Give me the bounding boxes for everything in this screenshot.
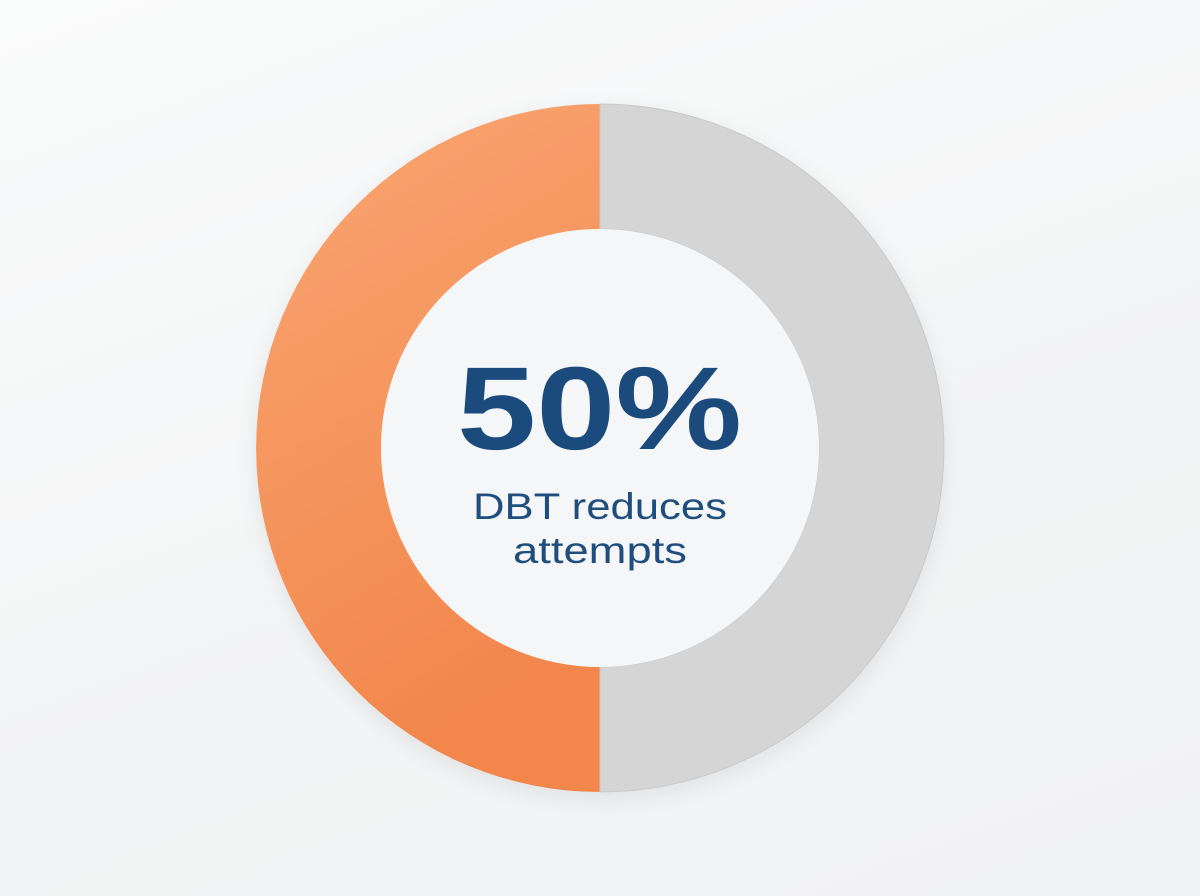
inner circle (381, 229, 819, 667)
segment: gray remainder (600, 104, 944, 792)
center label (457, 343, 742, 571)
big percentage: 50% (457, 343, 742, 475)
center label: attempts (513, 530, 687, 571)
caption: DBT reduces (473, 486, 727, 527)
segment: orange 50% (256, 104, 600, 792)
